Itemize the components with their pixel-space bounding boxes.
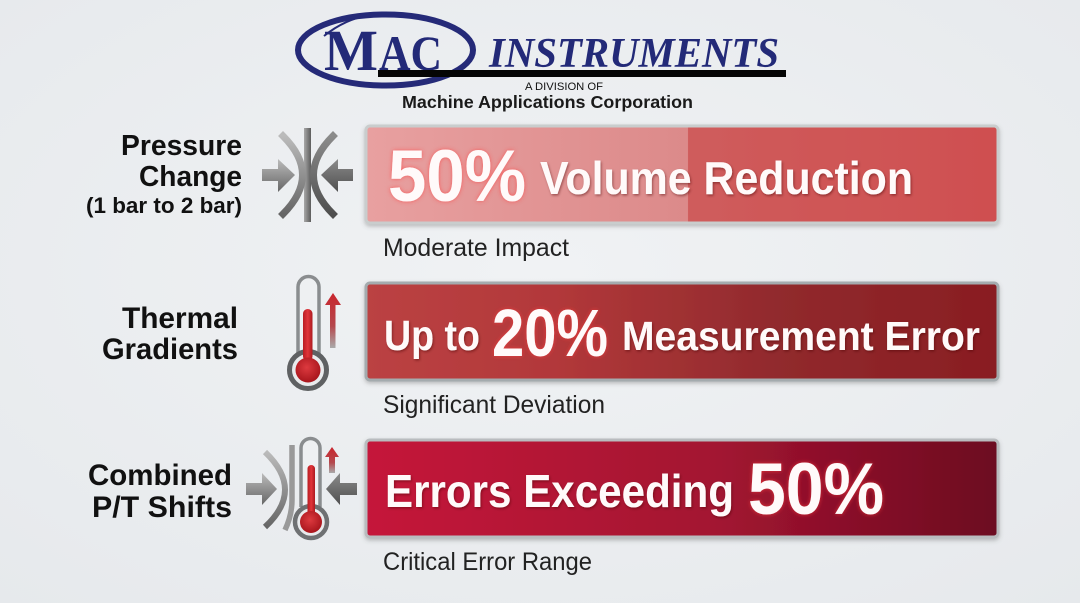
icon: thermometer with rising arrow xyxy=(290,276,341,388)
text: up to: Up to xyxy=(384,312,480,360)
logo: MAC Instruments xyxy=(298,14,786,112)
logo word MAC xyxy=(324,18,442,83)
stat label: Volume Reduction xyxy=(540,152,913,204)
row label: pressure change: (1 bar to 2 bar) xyxy=(86,193,242,218)
row label: thermal gradients xyxy=(102,302,238,366)
row label: combined shifts: P/T Shifts xyxy=(92,491,232,524)
caption: moderate impact: Moderate Impact xyxy=(383,234,569,262)
row label: thermal gradients: Gradients xyxy=(102,333,238,366)
logo word MAC: M xyxy=(324,18,378,83)
bar: errors exceeding xyxy=(366,440,998,537)
stat label: Measurement Error xyxy=(622,313,980,359)
stat label: Errors Exceeding xyxy=(385,465,734,517)
logo rule xyxy=(378,70,786,77)
row label: pressure change: Pressure xyxy=(121,130,242,162)
stat: 50%: 50% xyxy=(388,136,526,217)
stat: 50%: 50% xyxy=(748,449,884,530)
bar: volume reduction xyxy=(366,126,998,223)
logo company name: Machine Applications Corporation xyxy=(402,92,693,112)
icon: combined pressure and temperature xyxy=(246,438,357,538)
logo division line: A DIVISION OF xyxy=(525,81,603,93)
bar: measurement error xyxy=(366,283,998,380)
logo oval xyxy=(298,14,473,86)
caption: significant deviation: Significant Deviation xyxy=(383,391,605,419)
row label: pressure change xyxy=(86,130,242,218)
row label: combined shifts: Combined xyxy=(88,459,232,492)
logo word MAC: AC xyxy=(379,25,442,81)
row label: combined shifts xyxy=(88,459,232,524)
caption: critical error range: Critical Error Range xyxy=(383,548,592,576)
row label: pressure change: Change xyxy=(139,161,242,193)
row label: thermal gradients: Thermal xyxy=(122,302,238,335)
logo word INSTRUMENTS: INSTRUMENTS xyxy=(488,31,779,77)
stat: 20%: 20% xyxy=(492,296,608,371)
icon: pressure compression xyxy=(262,128,353,222)
